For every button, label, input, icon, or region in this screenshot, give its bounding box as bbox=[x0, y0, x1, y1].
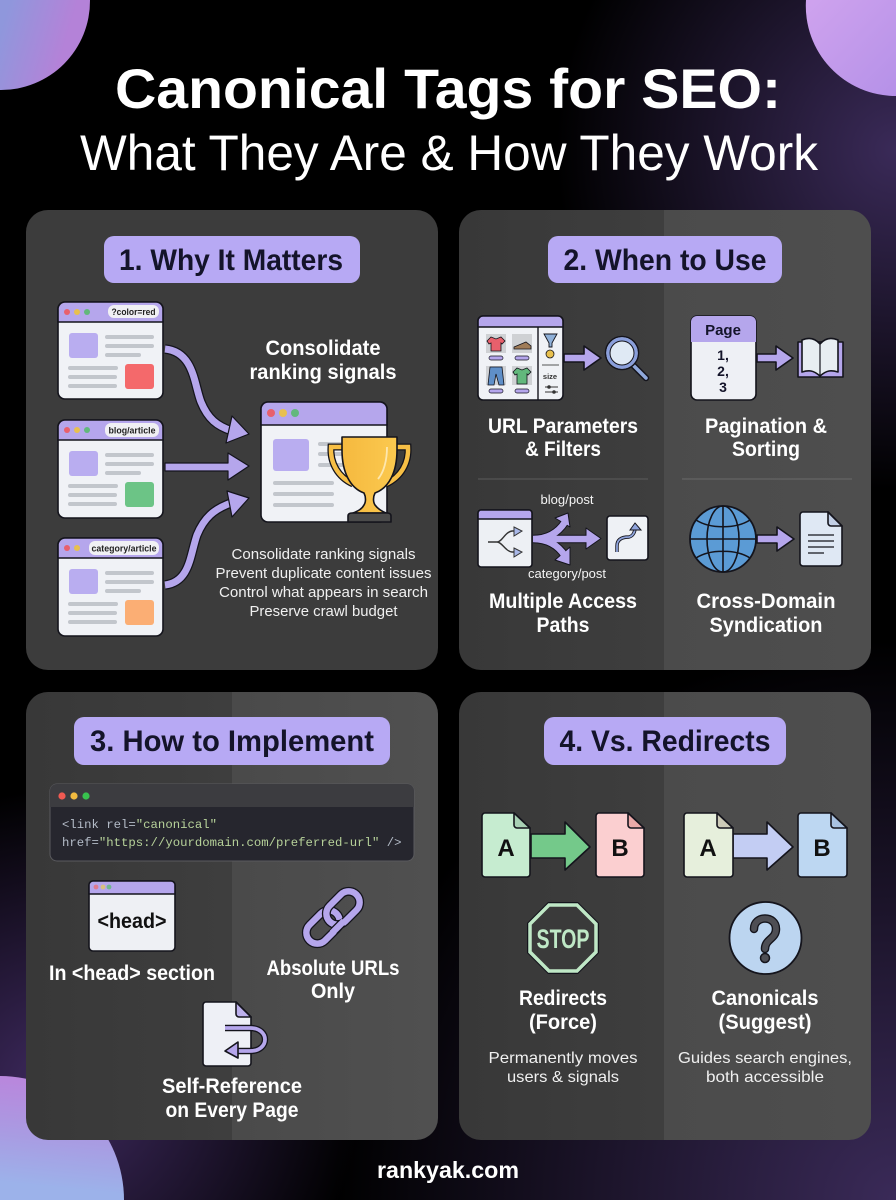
label: pagination bbox=[705, 415, 827, 461]
label: self-reference: on Every Page bbox=[166, 1099, 298, 1122]
diagram: canonical A to B: B bbox=[813, 835, 831, 862]
icon: branching window bbox=[478, 510, 532, 567]
text: redirects description: users & signals bbox=[507, 1069, 619, 1086]
code snippet: href="https://yourdomain.com/preferred-url" /> bbox=[62, 836, 401, 850]
label: multiple access paths bbox=[489, 590, 637, 637]
icon: page list bbox=[691, 316, 756, 400]
browser window: color parameter bbox=[58, 302, 163, 399]
arrow: bottom source to target bbox=[165, 491, 249, 585]
heading: how to implement bbox=[74, 717, 390, 765]
icon: page list: 3 bbox=[719, 379, 727, 395]
icon: self-reference document bbox=[203, 1002, 265, 1066]
icon: page list: 1, bbox=[717, 347, 729, 363]
heading: how to implement: 3. How to Implement bbox=[90, 725, 374, 758]
label: URL parameters: URL Parameters bbox=[488, 415, 638, 438]
label: pagination: Sorting bbox=[732, 438, 800, 461]
benefits list: Consolidate ranking signals bbox=[232, 546, 416, 563]
benefits list: Prevent duplicate content issues bbox=[216, 565, 432, 582]
target browser window bbox=[261, 402, 387, 522]
heading: vs redirects bbox=[544, 717, 786, 765]
label: canonicals: Canonicals bbox=[712, 987, 818, 1010]
label: cross-domain syndication: Syndication bbox=[710, 614, 822, 637]
footer: site name: rankyak.com bbox=[377, 1157, 519, 1183]
subheading: consolidate ranking signals bbox=[250, 337, 396, 384]
panel: vs redirects bbox=[459, 692, 871, 1140]
heading: why it matters bbox=[104, 236, 360, 283]
browser window: blog article bbox=[58, 420, 163, 518]
arrow: multiple paths bbox=[533, 513, 601, 565]
title bbox=[80, 57, 819, 181]
label: absolute URLs only bbox=[266, 957, 400, 1003]
label: pagination: Pagination & bbox=[705, 415, 827, 438]
label: URL parameters bbox=[488, 415, 638, 461]
icon: document bbox=[800, 512, 842, 566]
icon: product filter window bbox=[478, 316, 563, 400]
panel: why it matters bbox=[26, 210, 438, 670]
browser window: color parameter: ?color=red bbox=[112, 307, 156, 318]
diagram: canonical A to B bbox=[684, 813, 847, 877]
icon: product filter window: size bbox=[543, 372, 557, 381]
benefits list: Control what appears in search bbox=[219, 584, 428, 601]
label: redirects: (Force) bbox=[529, 1011, 597, 1034]
decorative corner circle: bottom left bbox=[0, 1076, 124, 1200]
label: self-reference: Self-Reference bbox=[162, 1075, 302, 1098]
code snippet bbox=[50, 784, 414, 861]
label: redirects: Redirects bbox=[519, 987, 607, 1010]
benefits list: Preserve crawl budget bbox=[250, 603, 398, 620]
arrow: page to book bbox=[757, 346, 793, 370]
label: canonicals: (Suggest) bbox=[718, 1011, 812, 1034]
label: canonicals bbox=[712, 987, 818, 1034]
heading: when to use bbox=[548, 236, 782, 283]
label: category post path: category/post bbox=[528, 567, 607, 581]
decorative corner circle: top right bbox=[806, 0, 896, 96]
icon: open book bbox=[798, 338, 843, 377]
decorative corner circle: top left bbox=[0, 0, 90, 90]
label: absolute URLs only: Absolute URLs bbox=[266, 957, 400, 980]
icon: chain link bbox=[302, 887, 364, 948]
icon: question mark bbox=[730, 902, 802, 974]
label: cross-domain syndication: Cross-Domain bbox=[696, 590, 836, 613]
browser window: category article: category/article bbox=[92, 544, 156, 554]
label: cross-domain syndication bbox=[696, 590, 836, 637]
arrow: filters to search bbox=[564, 346, 601, 370]
benefits list bbox=[216, 546, 432, 620]
title: Canonical Tags for SEO: bbox=[115, 57, 781, 120]
icon: trophy bbox=[331, 437, 408, 522]
label: URL parameters: & Filters bbox=[525, 438, 601, 461]
icon: page list: 2, bbox=[717, 363, 729, 379]
arrow: top source to target bbox=[165, 349, 249, 443]
icon: page list: Page bbox=[705, 322, 741, 339]
diagram: redirect A to B: B bbox=[611, 835, 629, 862]
code snippet: <link rel="canonical" bbox=[62, 818, 217, 832]
text: redirects description: Permanently moves bbox=[488, 1050, 638, 1067]
label: multiple access paths: Multiple Access bbox=[489, 590, 637, 613]
diagram: redirect A to B bbox=[482, 813, 644, 877]
icon: globe bbox=[690, 506, 756, 572]
diagram: redirect A to B: A bbox=[497, 835, 515, 862]
label: multiple access paths: Paths bbox=[536, 614, 590, 637]
arrow: middle source to target bbox=[165, 453, 249, 480]
label: in head section: In <head> section bbox=[49, 962, 215, 985]
icon: stop sign: STOP bbox=[536, 924, 590, 954]
heading: why it matters: 1. Why It Matters bbox=[119, 244, 343, 277]
panel: when to use bbox=[459, 210, 871, 670]
icon: stop sign bbox=[527, 902, 599, 974]
icon: head window: <head> bbox=[98, 910, 166, 933]
icon: preferred route bbox=[607, 516, 648, 560]
text: canonicals description: Guides search engines, bbox=[678, 1050, 852, 1067]
title: What They Are & How They Work bbox=[80, 125, 819, 181]
text: canonicals description: both accessible bbox=[706, 1069, 824, 1086]
panel: how to implement bbox=[26, 692, 438, 1140]
label: absolute URLs only: Only bbox=[311, 980, 355, 1003]
browser window: blog article: blog/article bbox=[108, 426, 156, 436]
text: canonicals description bbox=[678, 1050, 852, 1086]
browser window: category article bbox=[58, 538, 163, 636]
subheading: consolidate ranking signals: ranking signals bbox=[250, 361, 396, 384]
subheading: consolidate ranking signals: Consolidate bbox=[266, 337, 380, 360]
label: blog post path: blog/post bbox=[540, 493, 594, 507]
heading: when to use: 2. When to Use bbox=[564, 244, 766, 277]
icon: magnifier bbox=[606, 336, 646, 378]
label: self-reference bbox=[162, 1075, 302, 1122]
icon: head window bbox=[89, 881, 175, 951]
label: redirects bbox=[519, 987, 607, 1034]
heading: vs redirects: 4. Vs. Redirects bbox=[560, 725, 770, 758]
diagram: canonical A to B: A bbox=[699, 835, 717, 862]
arrow: globe to document bbox=[757, 527, 794, 551]
text: redirects description bbox=[488, 1050, 638, 1086]
